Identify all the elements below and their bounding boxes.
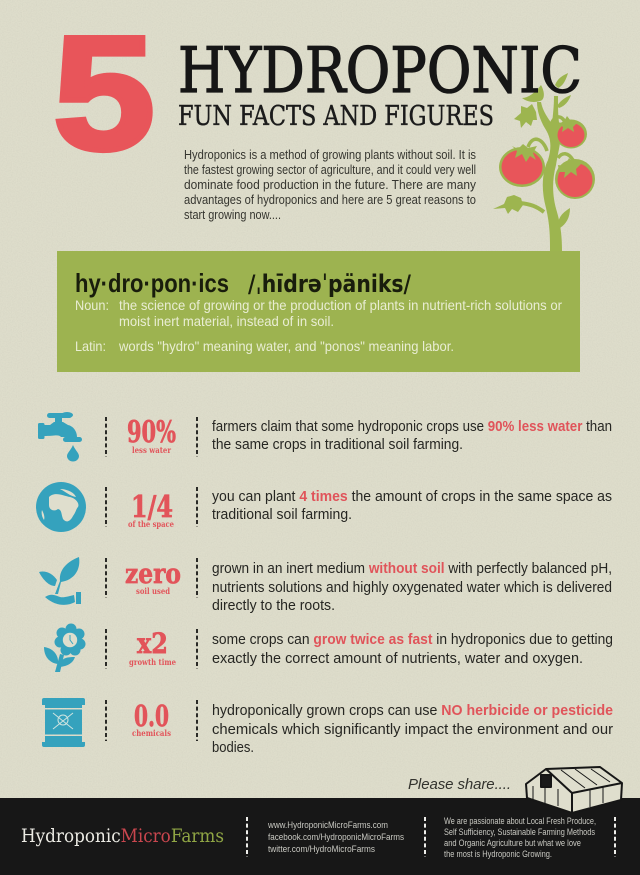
footer bar — [0, 798, 640, 875]
icon: globe — [36, 482, 86, 532]
intro paragraph: start growing now.... — [184, 207, 281, 222]
row 5: chemicals: chemicals which significantly impact the environment and our — [212, 722, 613, 738]
row 2: space — [36, 482, 612, 532]
row 1: water — [38, 412, 612, 462]
intro paragraph: advantages of hydroponics and here are 5 great reasons to — [184, 192, 476, 207]
fact text: some crops can grow twice as fast in hydroponics due to getting — [212, 632, 613, 648]
fact text: you can plant 4 times the amount of crops in the same space as — [212, 489, 612, 505]
panel: definition: moist inert material, instead of in soil. — [119, 313, 334, 329]
row 4: growth: exactly the correct amount of nutrients, water and oxygen. — [212, 651, 583, 667]
stat label: soil used — [136, 586, 170, 596]
intro paragraph: the fastest growing sector of agriculture, and it could very well — [184, 162, 476, 177]
row 5: chemicals — [42, 698, 613, 756]
about text: the most is Hydroponic Growing. — [444, 849, 552, 860]
fact text: hydroponically grown crops can use NO herbicide or pesticide — [212, 703, 613, 719]
stat: one quarter: 1/4 — [131, 490, 173, 525]
about text: We are passionate about Local Fresh Produce, — [444, 816, 596, 827]
icon: seedling in hand — [39, 557, 81, 605]
stat label: chemicals — [132, 728, 171, 738]
links: facebook.com/HydroponicMicroFarms — [268, 832, 404, 843]
row 3: soil: nutrients solutions and highly oxygenated water which is delivered — [212, 580, 612, 596]
intro paragraph: Hydroponics is a method of growing plants without soil. It is — [184, 147, 476, 162]
row 4: growth — [44, 624, 613, 672]
latin origin: Latin: — [75, 338, 106, 354]
subtitle: FUN FACTS AND FIGURES — [178, 101, 494, 132]
row 5: chemicals: bodies. — [212, 740, 254, 756]
panel: definition — [57, 251, 580, 372]
headword and pronunciation: hy·dro·pon·ics — [75, 268, 229, 298]
icon: clock flower — [44, 624, 86, 672]
icon: greenhouse — [526, 767, 622, 813]
row 1: water: the same crops in traditional soil farming. — [212, 437, 463, 453]
intro paragraph — [184, 147, 477, 222]
logo: HydroponicMicroFarms — [21, 825, 224, 847]
stat label: of the space — [128, 519, 174, 529]
fact text: grown in an inert medium without soil with perfectly balanced pH, — [212, 561, 612, 577]
big number 5: 5 — [53, 3, 155, 184]
about text: and Organic Agriculture but what we love — [444, 838, 581, 849]
row 3: soil — [39, 557, 612, 614]
links — [267, 820, 404, 855]
stat label: growth time — [129, 657, 176, 667]
fact text: farmers claim that some hydroponic crops use 90% less water than — [212, 419, 612, 435]
icon: tap — [38, 412, 82, 462]
intro paragraph: dominate food production in the future. There are many — [184, 177, 477, 192]
stat: zero: zero — [125, 559, 181, 590]
links: twitter.com/HydroMicroFarms — [268, 844, 375, 855]
links: www.HydroponicMicroFarms.com — [267, 820, 388, 831]
title: hydroponic: HYDROPONIC — [178, 34, 582, 107]
panel: definition: /ˌhīdrəˈpäniks/ — [248, 270, 411, 298]
icon: tomato plant — [493, 73, 595, 251]
divider — [105, 417, 107, 457]
please share note: Please share.... — [408, 776, 511, 793]
icon: toxic barrel — [42, 698, 85, 747]
about text: Self Sufficiency, Sustainable Farming Methods — [444, 827, 595, 838]
row 3: soil: directly to the roots. — [212, 598, 335, 614]
about text — [444, 816, 596, 860]
panel: definition: the science of growing or the production of plants in nutrient-rich solutions or — [119, 297, 562, 313]
stat: times two: x2 — [137, 627, 168, 660]
noun definition: Noun: — [75, 297, 109, 313]
panel: definition: words "hydro" meaning water, and "ponos" meaning labor. — [118, 338, 454, 354]
row 2: space: traditional soil farming. — [212, 507, 352, 523]
stat: 90 percent: 90% — [127, 415, 176, 450]
stat label: less water — [132, 445, 172, 455]
stat: zero point zero: 0.0 — [134, 699, 169, 733]
